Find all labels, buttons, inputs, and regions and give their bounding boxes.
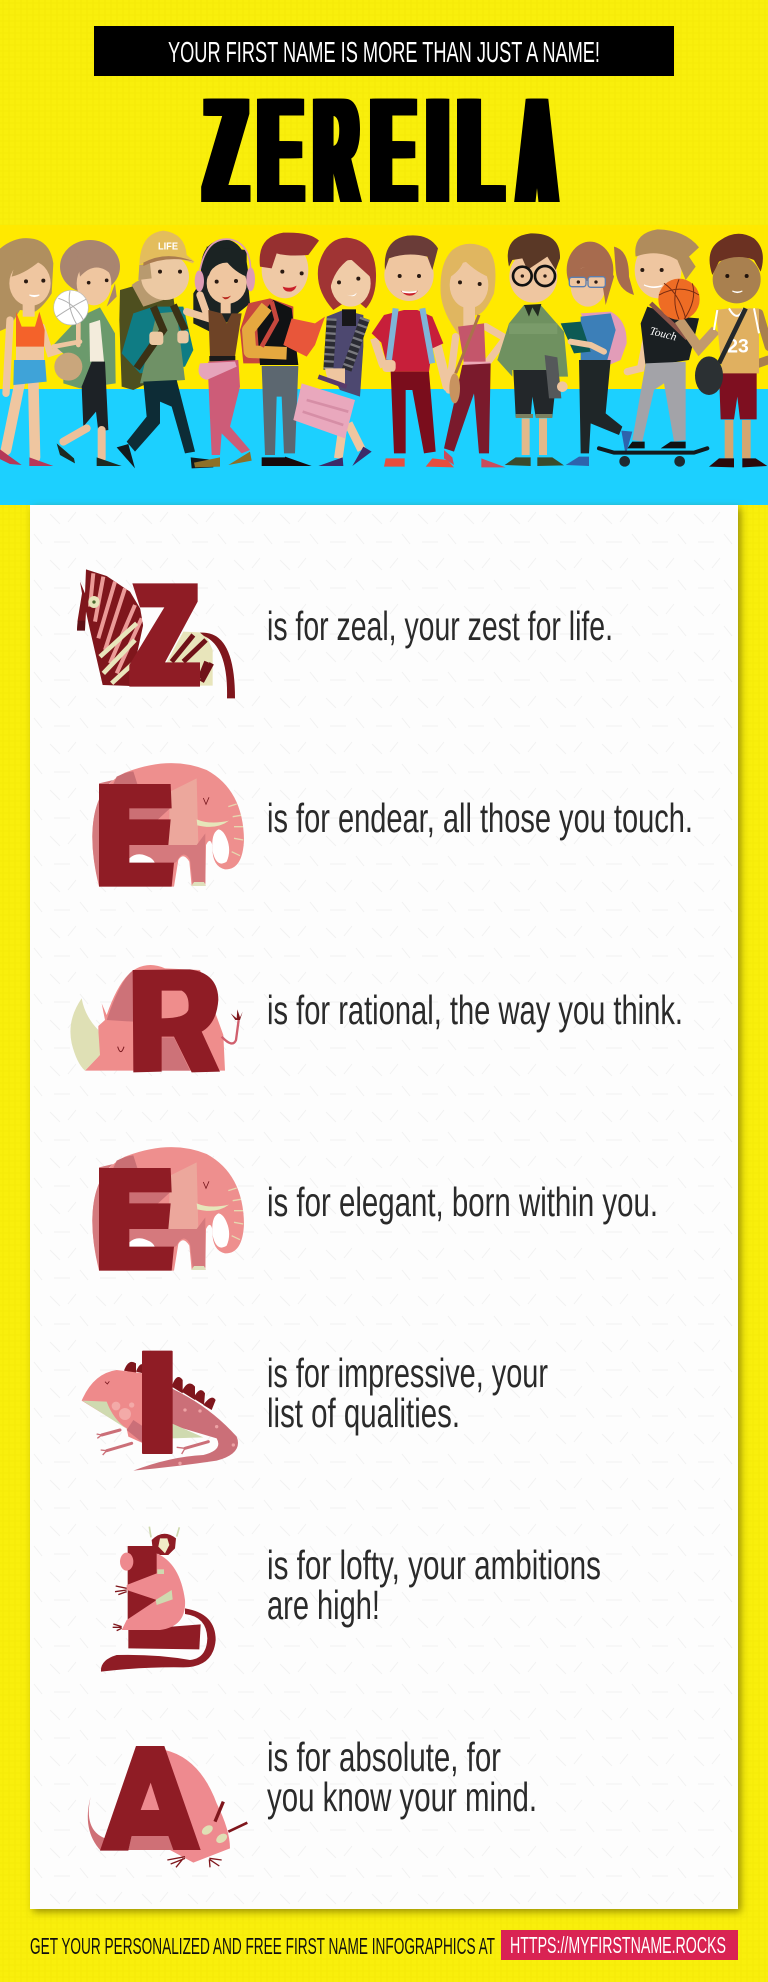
person: girl with ponytail and tablet: [561, 242, 634, 466]
header bar: [94, 26, 674, 76]
title: name: E: [366, 66, 408, 234]
icon: elephant letter E: [92, 763, 244, 887]
blue floor band: [0, 389, 768, 505]
title: name: L: [452, 66, 494, 234]
title: name: R: [309, 66, 351, 234]
icon: rhino letter R: [70, 965, 243, 1072]
text: L lines: are high!: [267, 1582, 380, 1628]
title: name: E: [253, 66, 295, 234]
icon: zebra letter Z: [77, 569, 235, 698]
people strip yellow: [0, 225, 768, 390]
person: boy in red shirt: [372, 235, 454, 467]
person: backpacker with cap: LIFE: [158, 241, 178, 252]
text: I lines: list of qualities.: [267, 1390, 460, 1436]
illustration: group of thirteen students: [0, 229, 768, 468]
white panel: [30, 505, 738, 1909]
person: girl with pink headphones: [187, 239, 255, 467]
title: name: I: [422, 66, 440, 234]
person: skater with basketball: [599, 229, 716, 467]
person: backpacker with cap: [117, 231, 213, 468]
title: name: Z: [200, 66, 234, 234]
text: A lines: [267, 1734, 537, 1820]
person: curly-haired boy with bag: 23: [727, 337, 749, 358]
person: skater with basketball: Touch: [648, 325, 678, 344]
text: A lines: you know your mind.: [267, 1774, 537, 1820]
person: blonde girl: [440, 244, 506, 467]
icon: elephant letter E second: [92, 1147, 244, 1271]
icon: lizard letter I: [82, 1351, 238, 1471]
person: girl with pink bag: [293, 238, 376, 466]
person: boy with glasses: [497, 233, 568, 466]
title: name: [200, 66, 560, 234]
person: girl with orange top: [0, 238, 77, 466]
icon: armadillo letter A: [88, 1746, 247, 1867]
text: L lines: [267, 1542, 601, 1628]
icon: lemur letter L: [101, 1527, 216, 1672]
text: A lines: is for absolute, for: [267, 1734, 501, 1780]
text: Z line: is for zeal, your zest for life.: [267, 603, 613, 649]
person: red-haired boy with book: [240, 233, 325, 466]
title: name: A: [513, 66, 546, 234]
text: I lines: [267, 1350, 548, 1436]
text: I lines: is for impressive, your: [267, 1350, 548, 1396]
text: L lines: is for lofty, your ambitions: [267, 1542, 601, 1588]
person: curly-haired boy with bag: [695, 234, 768, 467]
person: girl with volleyball: [53, 240, 122, 466]
